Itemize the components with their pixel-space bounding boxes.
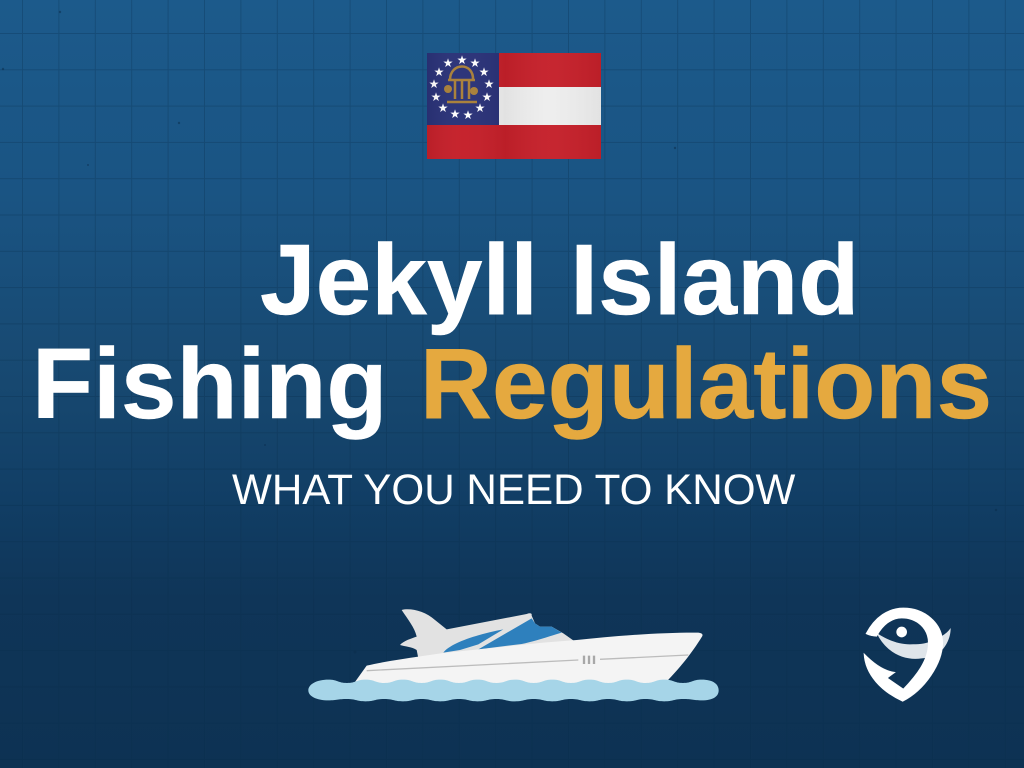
- logo band and tail: [877, 628, 951, 659]
- icon: Georgia state flag: ★: [475, 101, 485, 115]
- icon: Georgia state flag: ★: [479, 65, 489, 79]
- icon: Georgia state flag: ★: [429, 77, 439, 91]
- icon: Georgia state flag: ★: [463, 108, 473, 122]
- icon: Georgia state flag: ★: [450, 107, 460, 121]
- icon: Georgia state flag: [427, 53, 601, 159]
- icon: Georgia state flag: ★: [470, 56, 480, 70]
- icon: fish logo: [864, 608, 951, 702]
- icon: Georgia state flag: ★: [431, 90, 441, 104]
- icon: Georgia state flag: ★: [482, 90, 492, 104]
- icon: Georgia state flag: ★: [434, 65, 444, 79]
- waves: [308, 680, 719, 701]
- boat trim line: [367, 655, 688, 671]
- subtitle: WHAT YOU NEED TO KNOW: [232, 466, 795, 512]
- logo outline: [864, 608, 943, 701]
- boat windows: [443, 618, 562, 653]
- icon: Georgia state flag: ★: [443, 56, 453, 70]
- title: Fishing Regulations: Fishing Regulations: [32, 328, 992, 440]
- icon: Georgia state flag: ★: [484, 77, 494, 91]
- boat vents: [584, 656, 594, 664]
- title: Jekyll Island: Jekyll Island: [260, 224, 859, 336]
- boat hull: [352, 633, 703, 687]
- boat flybridge: [400, 609, 575, 662]
- icon: Georgia state flag: ★: [438, 101, 448, 115]
- icon: Georgia state flag: ★: [457, 53, 467, 67]
- icon: motor yacht on waves: [308, 609, 719, 702]
- logo eye: [896, 627, 907, 637]
